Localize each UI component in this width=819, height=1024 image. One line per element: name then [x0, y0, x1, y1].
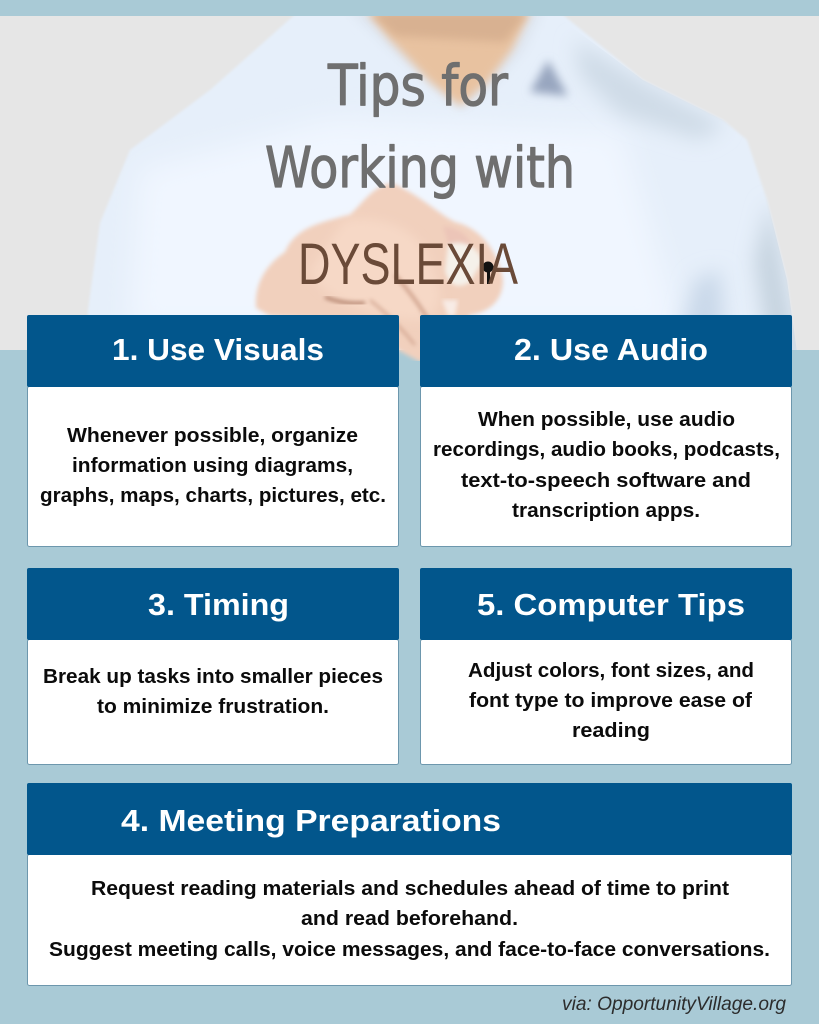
panel header — [27, 568, 399, 640]
body text: Break up tasks into smaller pieces — [43, 666, 383, 688]
body text: to minimize frustration. — [97, 696, 329, 718]
header photo: person writing with a marker — [0, 8, 819, 362]
panel body — [28, 640, 398, 764]
body text: Adjust colors, font sizes, and — [468, 660, 754, 682]
body text: font type to improve ease of — [469, 690, 752, 712]
heading: 3. Timing — [148, 587, 289, 622]
panel: 4. Meeting Preparations — [27, 783, 792, 986]
panel body — [420, 640, 792, 764]
title line: DYSLEXIA: DYSLEXIA — [298, 232, 518, 297]
panel: 3. Timing — [27, 568, 399, 764]
body text: Whenever possible, organize — [67, 425, 358, 447]
body text: and read beforehand. — [301, 908, 518, 930]
body text: Suggest meeting calls, voice messages, and face-to-face conversations. — [49, 939, 770, 961]
body text: When possible, use audio — [478, 409, 735, 431]
body text — [433, 409, 780, 522]
heading: 2. Use Audio — [514, 332, 708, 367]
panel: 1. Use Visuals — [27, 315, 399, 546]
panel body — [28, 386, 398, 546]
body text: recordings, audio books, podcasts, — [433, 439, 780, 461]
panel header — [27, 315, 399, 387]
panel: 5. Computer Tips — [420, 568, 792, 764]
source credit: via: OpportunityVillage.org — [562, 994, 786, 1015]
heading: 1. Use Visuals — [112, 332, 324, 367]
title line: Working with: Working with — [265, 136, 575, 201]
body text: text-to-speech software and — [461, 470, 751, 492]
body text: graphs, maps, charts, pictures, etc. — [40, 485, 386, 507]
body text — [49, 878, 770, 961]
title line: Tips for: Tips for — [327, 54, 509, 119]
panel header — [420, 315, 792, 387]
heading: 5. Computer Tips — [477, 587, 745, 622]
panel header — [27, 783, 792, 855]
body text: transcription apps. — [512, 500, 700, 522]
panel body — [28, 854, 792, 986]
body text — [468, 660, 754, 742]
title — [265, 54, 575, 297]
panel header — [420, 568, 792, 640]
body text: reading — [572, 720, 650, 742]
heading: 4. Meeting Preparations — [121, 803, 501, 838]
body text: Request reading materials and schedules ahead of time to print — [91, 878, 729, 900]
body text — [43, 666, 383, 718]
body text: information using diagrams, — [72, 455, 353, 477]
body text — [40, 425, 386, 507]
panel body — [420, 386, 792, 546]
panel: 2. Use Audio — [420, 315, 792, 546]
